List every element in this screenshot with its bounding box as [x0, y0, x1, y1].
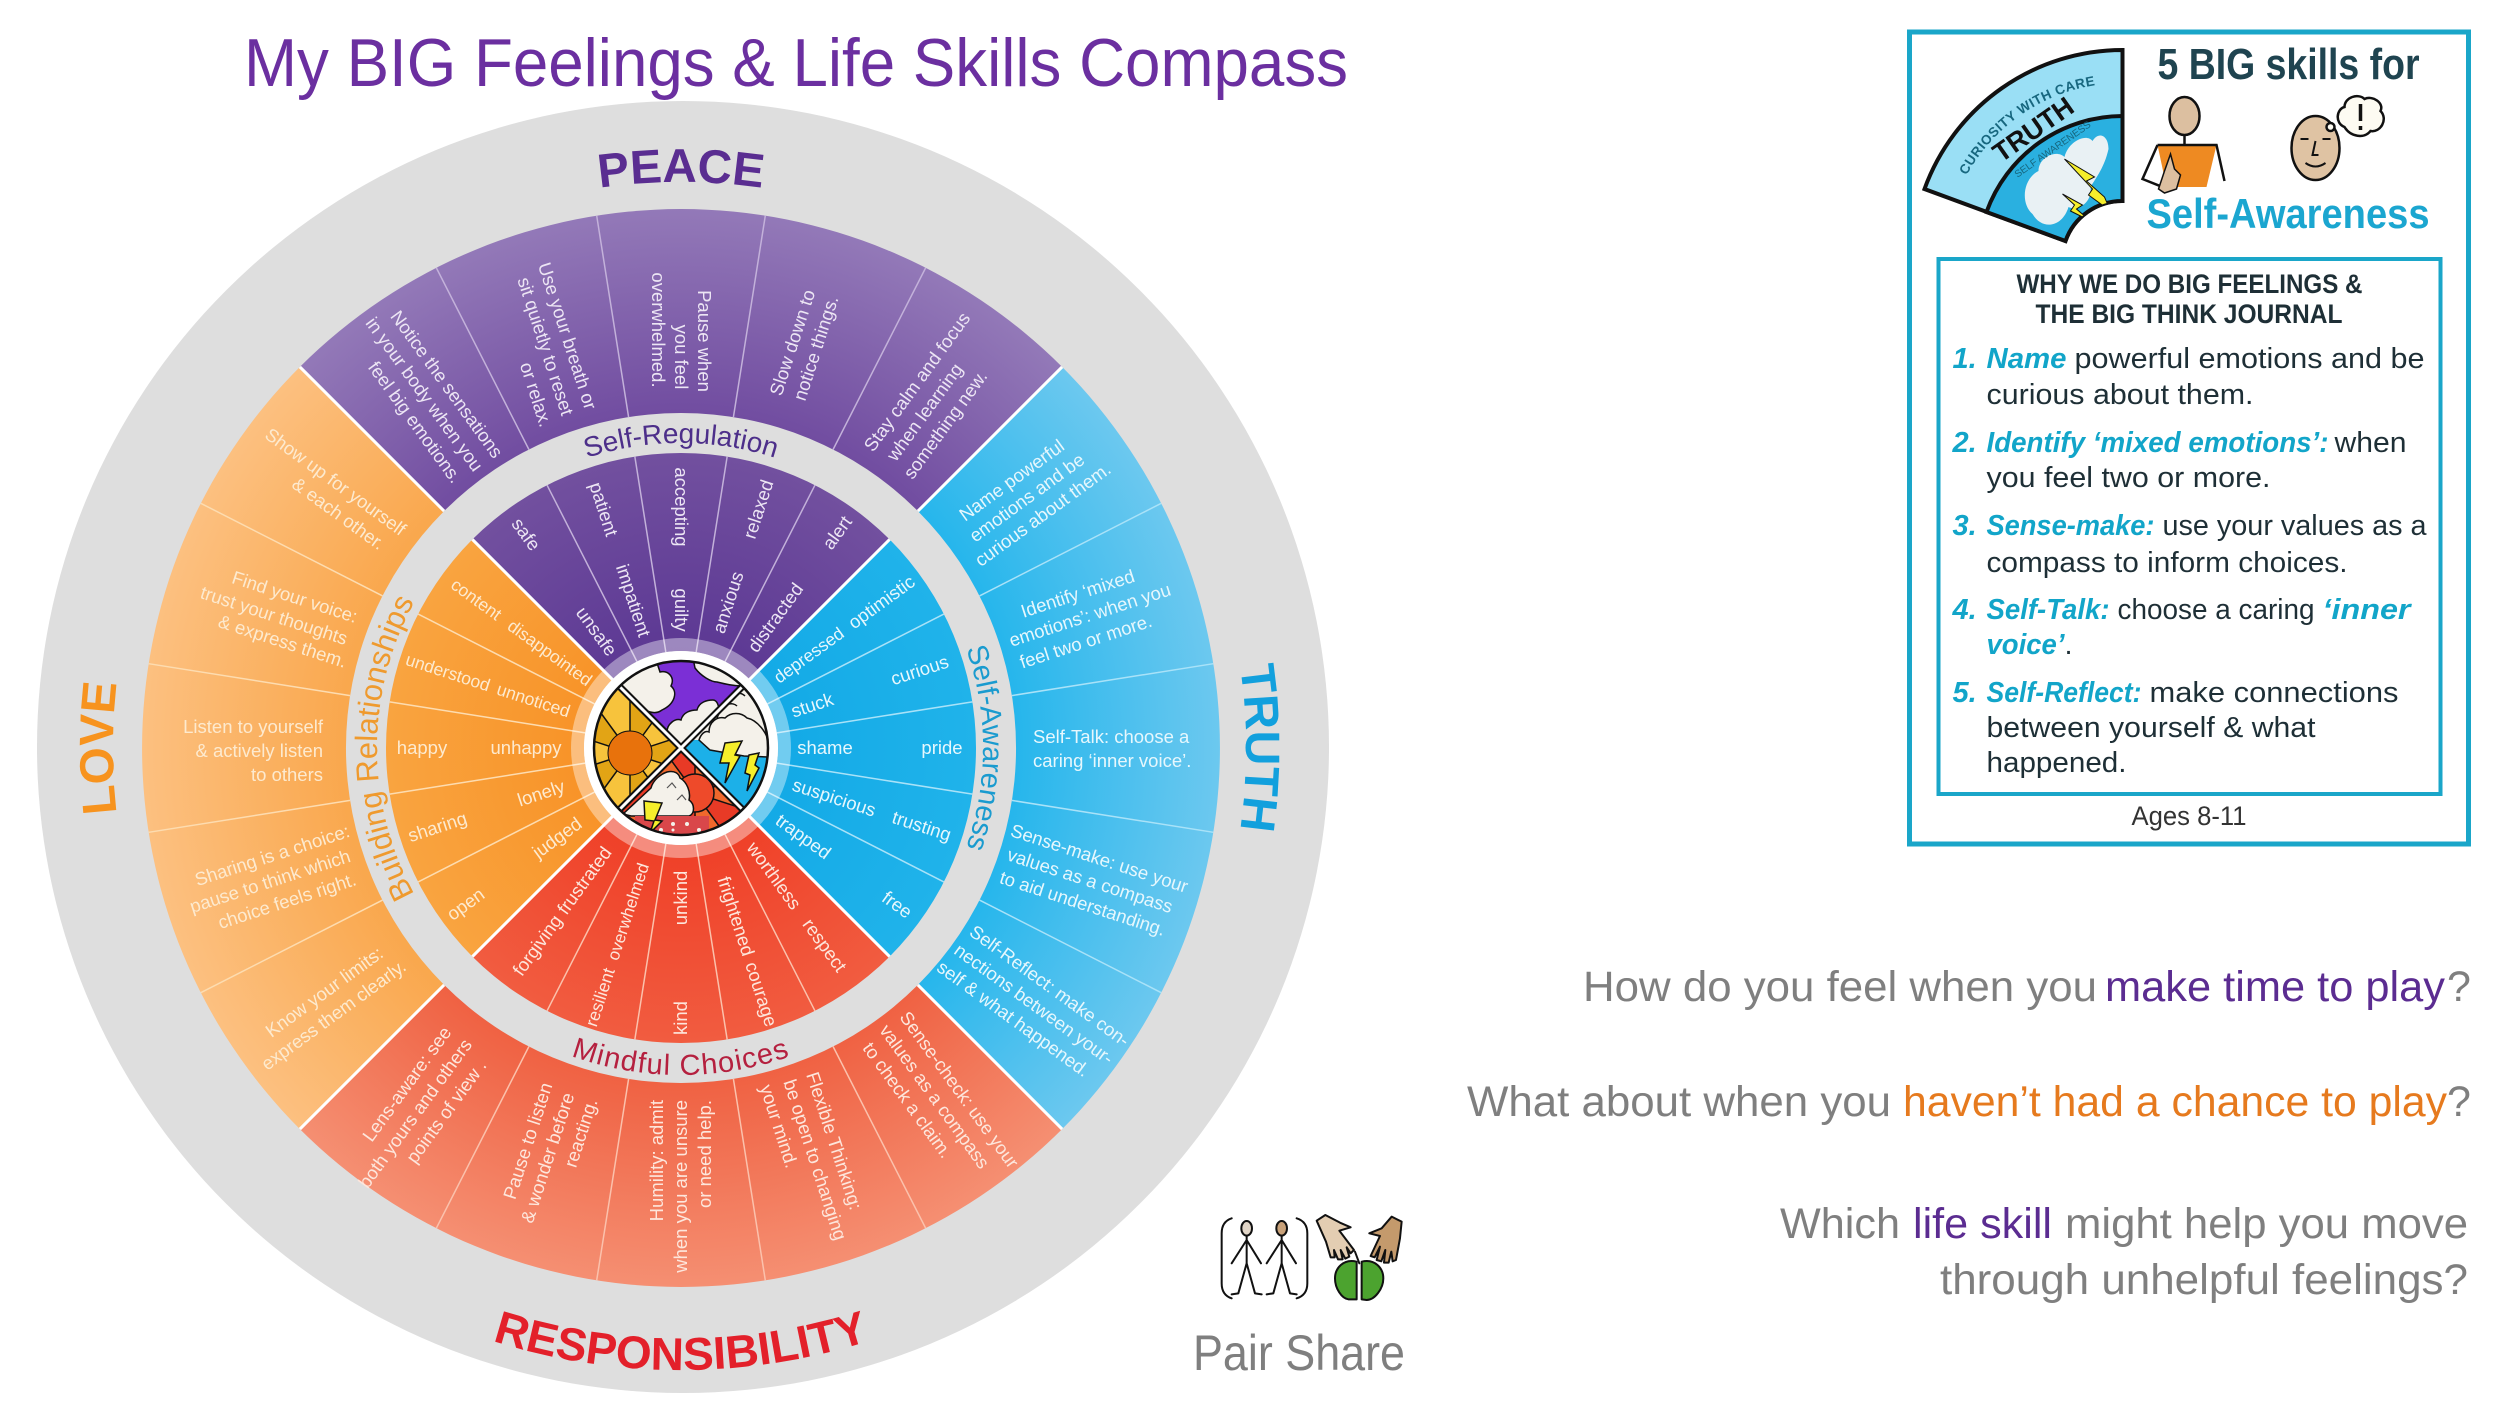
self-awareness skill texts: Identify ‘mixed: [1018, 565, 1137, 622]
question 1: ?: [2447, 963, 2471, 1011]
self-awareness skill texts: values as a compass: [1005, 844, 1176, 917]
building relationships skill texts: [180, 424, 411, 1074]
heading lines: WHY WE DO BIG FEELINGS &: [2016, 269, 2362, 299]
title: My BIG Feelings & Life Skills Compass: [244, 25, 1348, 101]
self-regulation skill texts: something new.: [899, 366, 991, 483]
item 5: make connections: [2150, 677, 2398, 709]
item 4: [1952, 594, 2412, 661]
self-awareness skill texts: to aid understanding.: [997, 867, 1168, 940]
panel: 5 BIG skills card: [1907, 30, 2471, 846]
compass wheel: [37, 101, 1329, 1393]
question 3: through unhelpful feelings?: [1940, 1256, 2468, 1304]
self-regulation feeling words: relaxed: [739, 477, 777, 541]
mindful choices feeling words: frightened: [713, 874, 759, 959]
question 1: [1583, 963, 2471, 1011]
item 3: compass to inform choices.: [1986, 547, 2348, 579]
item 4: ‘inner: [2322, 594, 2412, 626]
item 5: Self-Reflect:: [1986, 677, 2142, 709]
self-awareness feeling words: curious: [888, 651, 951, 689]
item 2: when: [2333, 427, 2406, 459]
building relationships skill texts: pause to think which: [187, 845, 353, 917]
self-awareness feeling words: suspicious: [790, 774, 879, 821]
mindful choices skill texts: Lens-aware: see: [358, 1022, 455, 1145]
heading: Mindful Choices: Mindful Choices: [573, 1038, 788, 1076]
self-regulation skill texts: [342, 260, 1013, 490]
self-awareness skill texts: self & what happened.: [933, 956, 1094, 1081]
outer orange band: [142, 367, 444, 1129]
self-regulation skill texts: overwhelmed.: [648, 272, 669, 388]
heading: RESPONSIBILITY: RESPONSIBILITY: [495, 1310, 860, 1370]
mindful choices feeling words: forgiving: [508, 911, 566, 980]
building relationships skill texts: express them clearly.: [257, 955, 410, 1074]
heading: Building Relationships: Building Relationships: [354, 596, 414, 902]
building relationships feeling words: unhappy: [491, 737, 562, 758]
self-awareness skill texts: Name powerful: [955, 435, 1068, 525]
self-regulation skill texts: feel big emotions.: [364, 357, 466, 487]
self-regulation skill texts: when learning: [882, 359, 967, 466]
card frame: [1910, 32, 2468, 844]
outer red band: [300, 985, 1062, 1287]
outer purple band: [300, 209, 1062, 511]
self-awareness skill texts: emotions’: when you: [1006, 579, 1173, 651]
item 3: use your values as a: [2162, 510, 2427, 542]
question 2: [1467, 1078, 2471, 1126]
self-awareness skill texts: [933, 421, 1191, 1089]
mindful choices feeling words: unkind: [670, 871, 691, 925]
icon: pair share symbols: [1222, 1215, 1402, 1300]
mindful choices feeling words: respect: [798, 914, 851, 976]
self-awareness feeling words: depressed: [770, 623, 848, 687]
self-regulation feeling words: accepting: [671, 467, 692, 547]
self-awareness skill texts: feel two or more.: [1017, 610, 1155, 672]
self-regulation skill texts: in your body when you: [362, 313, 487, 475]
building relationships skill texts: Show up for yourself: [261, 424, 411, 540]
self-regulation skill texts: you feel: [671, 325, 692, 389]
building relationships feeling words: disappointed: [504, 616, 596, 690]
curved wedge caption: CURIOSITY WITH CARE: [1960, 76, 2095, 174]
building relationships skill texts: & each other.: [288, 473, 389, 554]
item 3: Sense-make:: [1986, 510, 2154, 542]
building relationships feeling words: unnoticed: [494, 679, 573, 721]
wheel contents: [80, 149, 1298, 1370]
mindful choices skill texts: both yours and others: [354, 1035, 476, 1192]
mindful choices skill texts: to check a claim.: [859, 1038, 957, 1162]
mindful choices feeling words: worthless: [742, 837, 806, 913]
building relationships skill texts: choice feels right.: [215, 869, 359, 933]
question 3: might help you move: [2065, 1200, 2468, 1248]
outer blue band: [918, 367, 1220, 1129]
item 4: .: [2064, 629, 2073, 661]
building relationships feeling words: content: [447, 574, 506, 624]
heading: Self-Awareness: Self-Awareness: [2146, 190, 2430, 237]
self-regulation feeling words: [507, 467, 856, 660]
self-awareness skill texts: Self-Reflect: make con-: [966, 921, 1134, 1051]
icon: thinking face: [2292, 96, 2384, 180]
inner red band: [472, 817, 890, 1043]
mindful choices skill texts: values as a compass: [875, 1020, 994, 1172]
question 1: How do you feel when you: [1583, 963, 2097, 1011]
inner orange band: [386, 539, 612, 957]
question 2: haven’t had a chance to play: [1903, 1078, 2447, 1126]
building relationships skill texts: Find your voice:: [229, 567, 360, 627]
item 2: you feel two or more.: [1986, 462, 2270, 494]
mindful choices skill texts: or need help.: [694, 1100, 715, 1208]
icon: sun yellow quadrant: [595, 690, 676, 806]
icon: hands sharing apple: [1317, 1215, 1402, 1300]
self-regulation feeling words: impatient: [612, 561, 655, 639]
item 4: Self-Talk:: [1986, 594, 2110, 626]
heading: Self-Regulation: Self-Regulation: [584, 424, 777, 458]
self-regulation skill texts: Slow down to: [765, 287, 819, 398]
heading lines: [2016, 269, 2362, 329]
self-awareness feeling words: shame: [797, 737, 853, 758]
icon: storm clouds purple quadrant: [623, 662, 739, 743]
mindful choices feeling words: [508, 837, 851, 1035]
self-regulation skill texts: Notice the sensations: [386, 306, 507, 462]
question 1: make time to play: [2105, 963, 2446, 1011]
item 2: [1952, 427, 2406, 494]
building relationships feeling words: understood: [403, 649, 493, 695]
item 4: choose a caring: [2118, 594, 2314, 626]
self-awareness feeling words: optimistic: [844, 571, 919, 633]
wedge word: TRUTH: TRUTH: [1987, 91, 2079, 168]
item 5: between yourself & what: [1986, 712, 2316, 744]
item 3: 3.: [1952, 510, 1977, 542]
item 5: 5.: [1952, 677, 1977, 709]
self-regulation feeling words: anxious: [708, 569, 748, 636]
self-awareness skill texts: Sense-make: use your: [1008, 820, 1191, 897]
panel: truth / self-awareness quadrant: [750, 367, 1220, 1129]
self-awareness skill texts: Self-Talk: choose a: [1033, 726, 1190, 747]
building relationships skill texts: Know your limits:: [261, 942, 387, 1041]
icon: signing person: [2142, 97, 2224, 193]
mindful choices feeling words: overwhelmed: [604, 861, 653, 963]
self-awareness feeling words: trapped: [772, 809, 835, 863]
icon: central weather hub: [584, 651, 778, 845]
building relationships skill texts: & actively listen: [196, 740, 323, 761]
wedge word: SELF AWARENESS: SELF AWARENESS: [2013, 119, 2094, 180]
question 3: life skill: [1913, 1200, 2052, 1248]
translucent band around hub: [571, 638, 791, 858]
question 3: Which: [1780, 1200, 1900, 1248]
self-regulation feeling words: distracted: [743, 579, 807, 656]
icon: two people in brackets: [1222, 1218, 1307, 1298]
building relationships feeling words: open: [443, 883, 488, 925]
item 5: [1952, 677, 2398, 779]
mindful choices skill texts: & wonder before: [516, 1090, 578, 1226]
heading: PEACE: PEACE: [598, 149, 764, 188]
item 1: powerful emotions and be: [2074, 343, 2424, 375]
outer grey ring: [37, 101, 1329, 1393]
mindful choices skill texts: your mind.: [756, 1082, 802, 1170]
mindful choices feeling words: courage: [741, 959, 782, 1029]
self-regulation feeling words: alert: [818, 512, 856, 553]
mindful choices skill texts: [334, 1006, 1023, 1274]
self-awareness feeling words: stuck: [788, 688, 837, 722]
item 1: curious about them.: [1986, 379, 2254, 411]
building relationships skill texts: & express them.: [216, 610, 349, 672]
item 2: 2.: [1952, 427, 1977, 459]
text block: discussion questions: [1467, 963, 2471, 1304]
self-awareness feeling words: trusting: [890, 806, 954, 845]
item 1: [1952, 343, 2424, 411]
heading: TRUTH: TRUTH: [1240, 662, 1280, 830]
self-regulation skill texts: sit quietly to reset: [513, 274, 578, 418]
icon: lightning blue quadrant: [686, 690, 767, 806]
self-regulation skill texts: Stay calm and focus: [859, 308, 974, 455]
panel: peace / self-regulation quadrant: [300, 209, 1062, 679]
mindful choices skill texts: when you are unsure: [670, 1100, 691, 1274]
panel: why we do big feelings: [1938, 259, 2440, 794]
mindful choices skill texts: Pause to listen: [499, 1080, 556, 1202]
building relationships feeling words: happy: [397, 737, 448, 758]
building relationships skill texts: to others: [251, 764, 323, 785]
icon: cloud, sun and rain red quadrant: [623, 753, 739, 834]
mindful choices skill texts: Flexible Thinking:: [802, 1069, 867, 1212]
mindful choices skill texts: be open to changing: [779, 1077, 851, 1243]
self-awareness feeling words: [769, 571, 963, 922]
item 3: [1952, 510, 2427, 579]
inner blue band: [750, 539, 976, 957]
building relationships skill texts: Sharing is a choice:: [192, 820, 352, 890]
heading: 5 BIG skills for: 5 BIG skills for: [2158, 40, 2420, 89]
self-awareness skill texts: emotions and be: [965, 449, 1088, 546]
self-awareness skill texts: curious about them.: [971, 458, 1115, 571]
self-regulation skill texts: Pause when: [694, 290, 715, 392]
self-regulation feeling words: safe: [507, 514, 545, 554]
item 4: voice’: [1986, 629, 2065, 661]
self-regulation feeling words: guilty: [671, 588, 692, 632]
item 1: Name: [1986, 343, 2066, 375]
self-regulation skill texts: or relax.: [516, 359, 556, 429]
item 5: happened.: [1986, 747, 2126, 779]
self-awareness feeling words: pride: [921, 737, 963, 758]
self-awareness feeling words: free: [878, 887, 916, 922]
item 4: 4.: [1952, 594, 1977, 626]
self-regulation feeling words: patient: [585, 479, 622, 539]
question 2: What about when you: [1467, 1078, 1891, 1126]
building relationships skill texts: Listen to yourself: [183, 716, 324, 737]
building relationships feeling words: sharing: [405, 807, 469, 846]
building relationships feeling words: judged: [527, 813, 586, 863]
age label: Ages 8-11: [2132, 801, 2246, 831]
icon: truth wedge: [1922, 48, 2124, 244]
panel: responsibility / mindful choices quadrant: [300, 817, 1062, 1287]
inner purple band: [472, 453, 890, 679]
self-regulation skill texts: Use your breath or: [534, 260, 601, 412]
mindful choices feeling words: frustrated: [553, 843, 616, 918]
mindful choices skill texts: reacting.: [560, 1096, 602, 1170]
self-regulation skill texts: notice things.: [789, 293, 843, 403]
mindful choices skill texts: Humility: admit: [646, 1100, 667, 1221]
self-awareness skill texts: nections between your-: [950, 939, 1118, 1069]
caption: Pair Share: Pair Share: [1193, 1325, 1405, 1381]
panel: love / building relationships quadrant: [142, 367, 612, 1129]
heading: Self-Awareness: Self-Awareness: [968, 646, 1002, 850]
building relationships feeling words: lonely: [515, 775, 568, 810]
building relationships skill texts: trust your thoughts: [198, 582, 350, 649]
mindful choices skill texts: points of view .: [402, 1056, 491, 1167]
self-regulation feeling words: unsafe: [572, 603, 622, 660]
item 1: 1.: [1952, 343, 1977, 375]
question 2: ?: [2447, 1078, 2471, 1126]
heading lines: THE BIG THINK JOURNAL: [2036, 299, 2342, 329]
mindful choices feeling words: resilient: [581, 965, 619, 1029]
mindful choices skill texts: Sense-check: use your: [896, 1007, 1023, 1172]
self-awareness skill texts: caring ‘inner voice’.: [1033, 750, 1191, 771]
mindful choices feeling words: kind: [670, 1001, 691, 1035]
question 3: [1780, 1200, 2468, 1304]
item 2: Identify ‘mixed emotions’:: [1986, 427, 2328, 459]
heading: LOVE: LOVE: [80, 682, 116, 813]
building relationships feeling words: [397, 574, 596, 925]
